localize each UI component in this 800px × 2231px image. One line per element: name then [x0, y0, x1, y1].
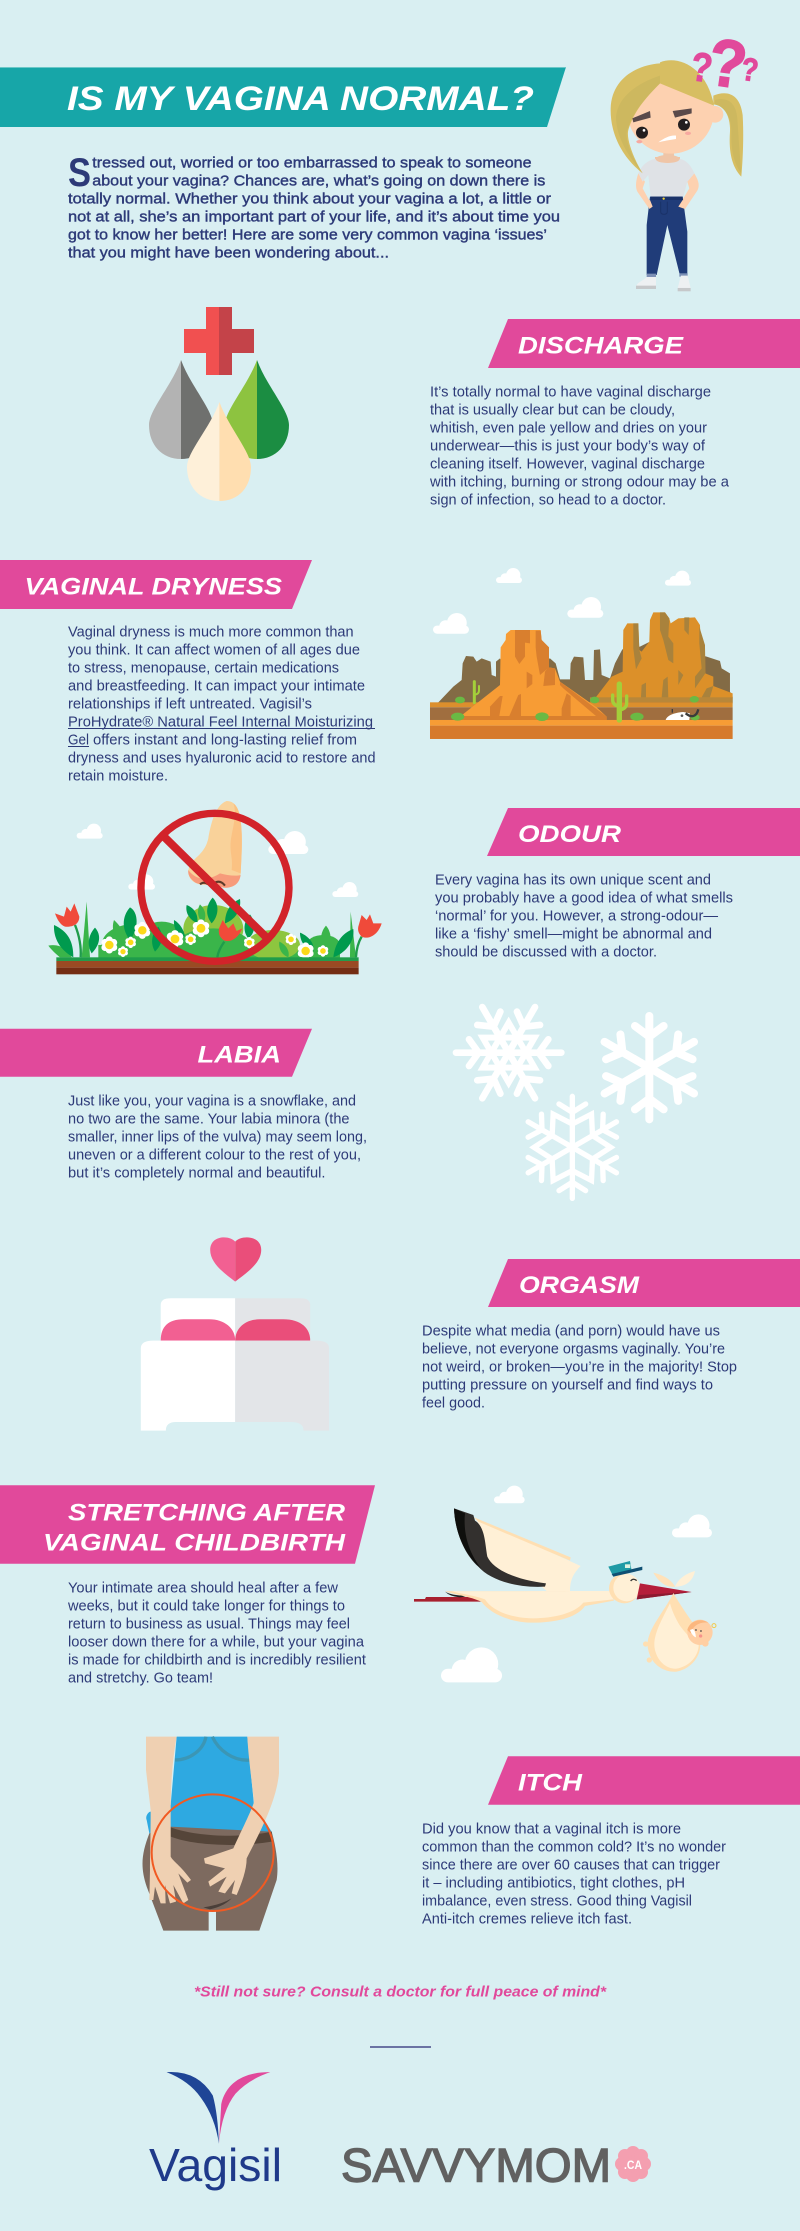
intro text: tressed out, worried or too embarrassed to speak to someone: [92, 155, 532, 172]
icon: medical cross and drops: [149, 307, 289, 501]
text: orgasm: putting pressure on yourself and find ways to: [422, 1377, 713, 1394]
icon: snowflakes: [456, 1000, 701, 1198]
text: vaginal dryness: ProHydrate® Natural Feel Internal Moisturizing: [68, 714, 373, 731]
title banner: IS MY VAGINA NORMAL?: [67, 80, 534, 118]
text: orgasm: believe, not everyone orgasms vaginally. You’re: [422, 1341, 725, 1358]
intro text: that you might have been wondering about...: [68, 245, 389, 262]
title banner: [0, 67, 566, 127]
text: discharge: [429, 384, 730, 509]
logo: SavvyMom: .CA: [624, 2158, 642, 2172]
text: stretching: looser down there for a while, but your vagina: [68, 1634, 365, 1651]
intro text: not at all, she’s an important part of your life, and it’s about time you: [68, 209, 560, 226]
heading: vaginal dryness: [0, 560, 312, 609]
text: orgasm: not weird, or broken—you’re in the majority! Stop: [422, 1359, 737, 1376]
text: stretching: weeks, but it could take longer for things to: [67, 1598, 345, 1615]
text: odour: like a ‘fishy’ smell—might be abnormal and: [435, 926, 712, 943]
logo: Vagisil: [149, 2072, 282, 2191]
panel: orgasm: [141, 1237, 800, 1431]
panel: stretching after vaginal childbirth: [0, 1485, 716, 1687]
text: discharge: whitish, even pale yellow and dries on your: [429, 420, 707, 437]
text: itch: common than the common cold? It’s no wonder: [422, 1839, 726, 1856]
panel: vaginal dryness: [0, 560, 733, 785]
text: labia: but it’s completely normal and beautiful.: [68, 1165, 326, 1182]
logo: SavvyMom: SAVVYMOM: [341, 2138, 611, 2192]
text: orgasm: Despite what media (and porn) would have us: [422, 1323, 720, 1340]
text: itch: it – including antibiotics, tight clothes, pH: [422, 1875, 685, 1892]
icon: confused girl: ?: [688, 43, 715, 91]
text: stretching: is made for childbirth and is incredibly resilient: [68, 1652, 367, 1669]
text: vaginal dryness: Vaginal dryness is much more common than: [68, 624, 354, 641]
heading: labia: [0, 1029, 312, 1077]
panel: intro: [0, 24, 761, 291]
heading: orgasm: [488, 1259, 800, 1307]
text: discharge: that is usually clear but can be cloudy,: [430, 402, 675, 419]
heading: stretching after vaginal childbirth: [0, 1485, 375, 1564]
text: discharge: cleaning itself. However, vaginal discharge: [430, 456, 705, 473]
text: vaginal dryness: offers instant and long-lasting relief from: [93, 732, 357, 749]
heading: itch: [488, 1756, 800, 1805]
text: vaginal dryness: retain moisture.: [68, 768, 168, 785]
text: orgasm: feel good.: [422, 1395, 485, 1412]
heading: labia: LABIA: [198, 1042, 281, 1069]
text: odour: Every vagina has its own unique scent and: [435, 872, 711, 889]
panel: labia: [0, 1000, 701, 1198]
text: itch: Did you know that a vaginal itch is more: [422, 1821, 681, 1838]
heading: orgasm: ORGASM: [519, 1272, 640, 1299]
text: odour: should be discussed with a doctor.: [435, 944, 657, 961]
icon: confused girl: [611, 24, 761, 291]
heading: discharge: DISCHARGE: [518, 332, 684, 359]
icon: stork carrying baby: [414, 1486, 716, 1682]
icon: nose over flowers with prohibition sign: [48, 801, 382, 974]
text: vaginal dryness: Gel: [68, 732, 89, 749]
intro text: about your vagina? Chances are, what’s going on down there is: [92, 173, 545, 190]
heading: stretching after vaginal childbirth: STRETCHING AFTER: [68, 1500, 346, 1527]
panel: itch: [143, 1737, 800, 1931]
text: discharge: underwear—this is just your body’s way of: [430, 438, 706, 455]
heading: odour: [487, 808, 800, 856]
text: itch: imbalance, even stress. Good thing Vagisil: [422, 1893, 692, 1910]
text: vaginal dryness: [68, 624, 376, 785]
text: orgasm: [422, 1323, 737, 1412]
text: vaginal dryness: and breastfeeding. It can impact your intimate: [68, 678, 365, 695]
text: discharge: with itching, burning or strong odour may be a: [429, 474, 730, 491]
panel: odour: [48, 801, 800, 974]
text: itch: Anti-itch cremes relieve itch fast.: [422, 1911, 632, 1928]
icon: confused girl: ?: [739, 52, 761, 89]
heading: itch: ITCH: [518, 1770, 583, 1797]
text: labia: uneven or a different colour to the rest of you,: [68, 1147, 361, 1164]
text: vaginal dryness: relationships if left untreated. Vagisil’s: [68, 696, 312, 713]
icon: torso with itch circle: [143, 1737, 279, 1931]
intro text: S: [68, 151, 91, 195]
text: labia: no two are the same. Your labia minora (the: [68, 1111, 350, 1128]
text: stretching: Your intimate area should heal after a few: [68, 1580, 338, 1597]
heading: stretching after vaginal childbirth: VAGINAL CHILDBIRTH: [43, 1530, 346, 1557]
text: odour: ‘normal’ for you. However, a strong-odour—: [435, 908, 718, 925]
text: labia: [68, 1093, 367, 1182]
intro text: totally normal. Whether you think about your vagina a lot, a little or: [68, 191, 551, 208]
logo: Vagisil: Vagisil: [149, 2139, 282, 2191]
text: stretching: and stretchy. Go team!: [68, 1670, 213, 1687]
icon: bed with heart: [141, 1237, 329, 1431]
text: odour: [435, 872, 733, 961]
text: stretching: [67, 1580, 367, 1687]
text: stretching: return to business as usual. Things may feel: [68, 1616, 350, 1633]
text: labia: smaller, inner lips of the vulva) may seem long,: [68, 1129, 367, 1146]
text: discharge: sign of infection, so head to a doctor.: [430, 492, 666, 509]
heading: odour: ODOUR: [518, 821, 622, 848]
callout: consult a doctor: *Still not sure? Consult a doctor for full peace of mind*: [194, 1984, 607, 2001]
intro text: [68, 151, 560, 262]
text: itch: [422, 1821, 726, 1928]
text: vaginal dryness: dryness and uses hyaluronic acid to restore and: [68, 750, 376, 767]
text: vaginal dryness: to stress, menopause, certain medications: [68, 660, 339, 677]
text: discharge: It’s totally normal to have vaginal discharge: [430, 384, 711, 401]
text: itch: since there are over 60 causes that can trigger: [422, 1857, 720, 1874]
panel: discharge: [149, 307, 800, 509]
heading: vaginal dryness: VAGINAL DRYNESS: [24, 574, 282, 601]
text: odour: you probably have a good idea of what smells: [435, 890, 733, 907]
heading: discharge: [488, 319, 800, 368]
icon: desert landscape: [430, 568, 733, 739]
intro text: got to know her better! Here are some very common vagina ‘issues’: [68, 227, 547, 244]
text: vaginal dryness: you think. It can affect women of all ages due: [68, 642, 360, 659]
text: labia: Just like you, your vagina is a snowflake, and: [68, 1093, 356, 1110]
icon: confused girl: ?: [704, 24, 751, 103]
